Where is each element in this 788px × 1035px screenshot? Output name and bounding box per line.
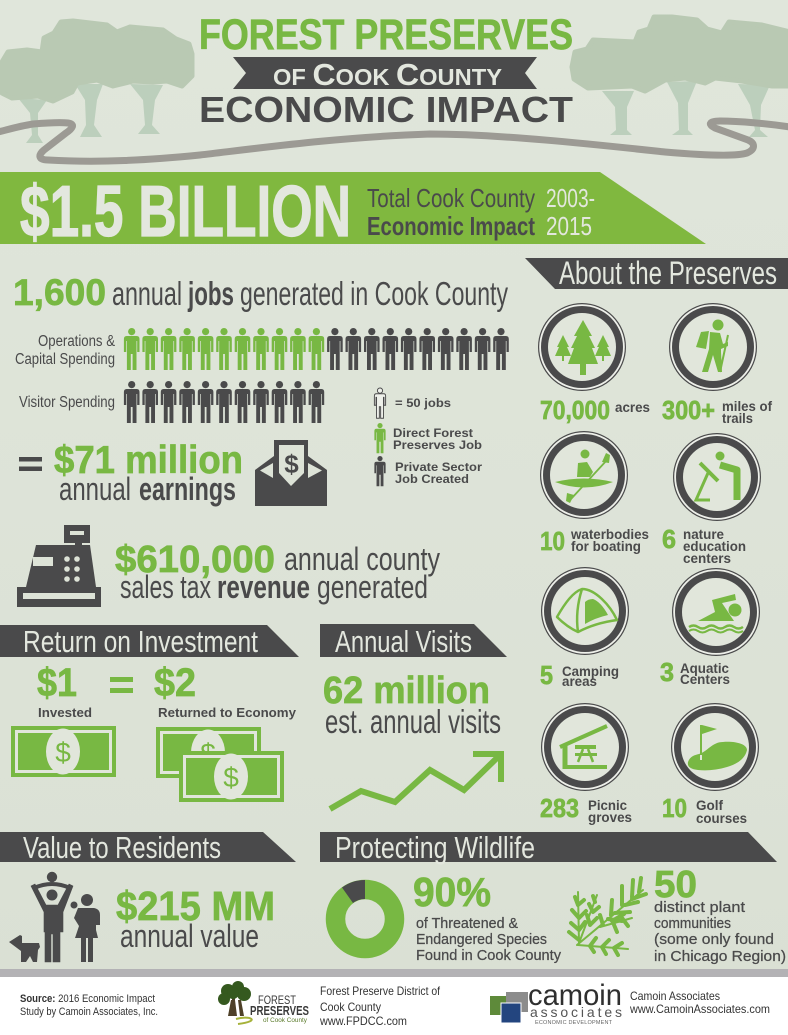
icon: two bills (156, 727, 284, 802)
panel: jobs (13, 272, 509, 486)
icon: trees (538, 303, 626, 391)
sales tax caption: sales tax (120, 569, 211, 605)
Forest Preserve District contact: Forest Preserve District of (320, 984, 441, 998)
stat: trails: trails (722, 411, 753, 426)
source note (20, 993, 158, 1018)
right trees (572, 17, 788, 137)
Forest Preserve District contact: Cook County (320, 1000, 381, 1014)
stat: picnic: groves (588, 810, 632, 825)
stat: waterbodies: waterbodies (570, 527, 649, 542)
heading: Value to Residents (23, 830, 221, 865)
icon: tent (541, 567, 629, 655)
earnings caption: annual (59, 471, 131, 507)
pictogram row: visitor spending (124, 381, 324, 423)
stat: golf: Golf (696, 798, 723, 813)
invested label: Invested (38, 706, 92, 720)
panel: annual visits (320, 624, 507, 809)
one dollar: $1 (37, 661, 77, 705)
stat: waterbodies (540, 431, 649, 556)
icon: single bill (11, 726, 116, 777)
icon: fern sprigs (569, 878, 646, 955)
icon: picnic shelter (541, 703, 629, 791)
sales tax figure: $610,000 (115, 539, 275, 581)
stat: waterbodies: for boating (571, 539, 641, 554)
logo: Forest Preserves: PRESERVES (250, 1003, 309, 1018)
source note: Source: 2016 Economic Impact (20, 993, 155, 1005)
source note: Study by Camoin Associates, Inc. (20, 1006, 158, 1018)
visits figure: 62 million (323, 670, 490, 712)
legend (374, 388, 482, 486)
title line 3: ECONOMIC IMPACT (199, 89, 573, 130)
sales tax caption (120, 541, 440, 605)
icon: kayak (540, 431, 628, 519)
legend: dark figure: Private Sector (395, 460, 482, 474)
stat: nature centers: education (683, 539, 746, 554)
icon: family with dog (9, 872, 100, 962)
legend: green figure: Preserves Job (393, 438, 482, 452)
sales tax caption: revenue (217, 569, 310, 605)
title (199, 11, 573, 130)
legend: dark figure (374, 456, 482, 486)
jobs heading (13, 272, 508, 313)
stat: golf (662, 703, 759, 826)
icon: envelope with dollar: $ (284, 449, 299, 479)
value figure: $215 MM (116, 883, 275, 929)
logo: Camoin Associates (490, 979, 622, 1026)
left trees (2, 21, 192, 143)
row label: operations: Operations & (38, 333, 116, 350)
heading (320, 830, 777, 865)
species caption: of Threatened & (416, 916, 518, 932)
earnings caption (59, 471, 236, 507)
banner caption: Total Cook County (367, 183, 535, 213)
logo: Forest Preserves: FOREST (258, 993, 297, 1007)
stat: aquatic: Centers (680, 672, 730, 687)
panel: earnings (19, 439, 327, 507)
panel: sales tax (17, 525, 440, 607)
species figure: 90% (413, 869, 491, 915)
stat: trails (662, 303, 772, 426)
header illustration: trees and path (0, 17, 788, 161)
logo: Camoin Associates: camoin (528, 979, 622, 1012)
sales tax caption: annual county (284, 541, 440, 577)
pictogram row: operations and capital spending (124, 328, 509, 370)
legend: green figure (374, 423, 482, 453)
panel: about the preserves (525, 255, 788, 826)
stat: aquatic: Aquatic (680, 661, 729, 676)
heading: Annual Visits (335, 624, 472, 659)
jobs heading: annual (112, 275, 182, 312)
stat: picnic: 283 (540, 793, 579, 823)
stat: golf: courses (696, 811, 747, 826)
plants figure: 50 (654, 864, 697, 906)
icon: envelope with dollar (255, 440, 327, 506)
logo: Camoin Associates: associates (530, 1004, 622, 1020)
heading: Return on Investment (23, 624, 258, 659)
icon: swimmer (672, 568, 760, 656)
stat: nature centers: 6 (662, 524, 676, 554)
banner years: 2003- (546, 183, 595, 213)
winding path (0, 121, 788, 161)
stat: nature centers: centers (683, 551, 731, 566)
banner caption bold: Economic Impact (367, 211, 535, 241)
value caption: annual value (120, 918, 259, 954)
stat: acres: acres (615, 400, 650, 415)
row label: operations (15, 333, 116, 368)
title line 2: OF COOK COUNTY (273, 57, 502, 92)
stat: trails: 300+ (662, 395, 715, 425)
legend: outline figure: = 50 jobs (395, 398, 451, 410)
title line 1: FOREST PRESERVES (199, 11, 573, 59)
icon: golf green (671, 703, 759, 791)
stat: trails: miles of (722, 399, 772, 414)
stat: camping: Camping (562, 664, 619, 679)
row label: visitor: Visitor Spending (19, 394, 115, 411)
two dollars: $2 (154, 661, 196, 705)
stat: camping: areas (562, 674, 597, 689)
logo: Forest Preserves: of Cook County (263, 1018, 307, 1024)
plants caption: distinct plant (654, 900, 745, 916)
jobs heading: jobs (187, 275, 234, 312)
Camoin contact: www.CamoinAssociates.com (629, 1002, 770, 1016)
plants caption: communities (654, 916, 731, 932)
Camoin contact: Camoin Associates (630, 989, 720, 1003)
species caption: Endangered Species (416, 932, 547, 948)
title ribbon (233, 57, 537, 89)
stat: acres (538, 303, 650, 425)
returned label: Returned to Economy (158, 706, 296, 720)
big figure: $1.5 BILLION (20, 172, 351, 252)
icon: person at viewing scope (673, 433, 761, 521)
stat: camping (540, 567, 629, 690)
legend: dark figure: Job Created (395, 472, 469, 486)
stat: nature centers (662, 433, 761, 566)
stat: aquatic (660, 568, 760, 687)
plants caption (654, 900, 786, 965)
stat: waterbodies: 10 (540, 526, 565, 556)
panel: protecting wildlife (320, 830, 786, 965)
logo: Forest Preserves (218, 981, 309, 1024)
donut chart: 90 percent (336, 880, 394, 948)
visits caption: est. annual visits (325, 703, 501, 740)
panel: value to residents (0, 830, 296, 962)
plants caption: (some only found (654, 932, 774, 948)
stat: picnic: Picnic (588, 798, 627, 813)
stat: nature centers: nature (683, 527, 724, 542)
jobs heading: 1,600 (13, 272, 106, 313)
legend: green figure: Direct Forest (393, 426, 473, 440)
icon: single bill: $ (55, 737, 71, 768)
heading: Protecting Wildlife (335, 830, 535, 865)
jobs heading: generated in Cook County (240, 275, 508, 312)
plants caption: in Chicago Region) (654, 949, 786, 965)
stat: picnic (540, 703, 632, 825)
equals sign (19, 457, 42, 471)
stat: acres: 70,000 (540, 395, 610, 425)
banner years end: 2015 (546, 211, 592, 241)
species caption (416, 916, 562, 964)
Camoin contact (629, 989, 770, 1016)
icon: two bills: $ (200, 738, 216, 769)
green headline banner (0, 172, 706, 252)
earnings figure: $71 million (54, 439, 243, 482)
icon: two bills: $ (223, 762, 239, 793)
stat: golf: 10 (662, 793, 687, 823)
footer (0, 969, 788, 1035)
equals (110, 677, 133, 693)
arrow: rising trend (330, 754, 501, 809)
earnings caption: earnings (139, 471, 236, 507)
Forest Preserve District contact: www.FPDCC.com (319, 1014, 407, 1028)
species caption: Found in Cook County (416, 948, 562, 964)
icon: hiker (669, 303, 757, 391)
Forest Preserve District contact (319, 984, 441, 1028)
row label: operations: Capital Spending (15, 351, 115, 368)
stat: aquatic: 3 (660, 657, 674, 687)
panel: return on investment (0, 624, 299, 802)
sales tax caption: generated (317, 569, 428, 605)
icon: cash register (17, 525, 101, 607)
logo: Camoin Associates: ECONOMIC DEVELOPMENT (535, 1020, 613, 1026)
stat: camping: 5 (540, 660, 553, 690)
